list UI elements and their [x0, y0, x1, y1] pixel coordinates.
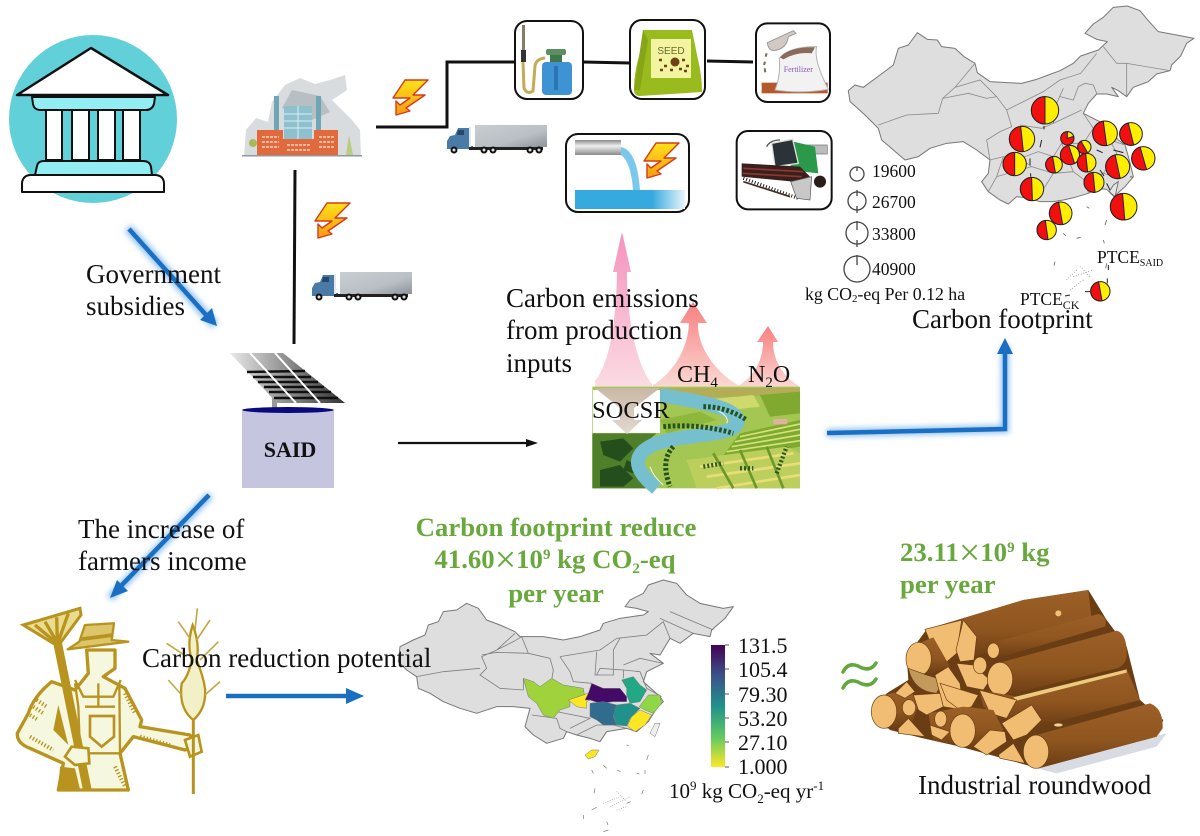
- pie charts PTCE by province: [1003, 97, 1155, 303]
- national outline: [398, 580, 733, 743]
- text: carbon footprint reduce heading: kg CO: [550, 544, 632, 574]
- text: carbon emissions from production inputs: from production: [506, 315, 683, 345]
- arrow: farmer to reduction map: [226, 688, 364, 704]
- Taiwan and South China Sea islands: [1054, 177, 1133, 290]
- illustration: farmer with rake and wheat: [17, 608, 220, 794]
- text: SOCSR: SOCSR: [592, 397, 670, 424]
- text: increase of farmers income: The increase of: [78, 514, 244, 544]
- legend: pie size: -eq Per 0.12 ha: [857, 284, 965, 304]
- text: industrial roundwood: Industrial roundwood: [918, 770, 1152, 800]
- legend: colour bar: 1.000: [738, 754, 788, 779]
- legend: colour bar: 10: [669, 779, 690, 803]
- legend: pie size: 2: [852, 293, 857, 305]
- text: increase of farmers income: farmers income: [78, 546, 247, 576]
- arrow: SAID to farmland: [398, 439, 538, 447]
- map: carbon footprint China: [848, 6, 1194, 303]
- text: N2O: N: [748, 362, 765, 388]
- text: 23.11 x 10^9 kg per year: per year: [900, 569, 996, 599]
- legend: pie size: [805, 161, 965, 305]
- text: carbon footprint reduce heading: Carbon footprint reduce: [416, 512, 697, 542]
- text: 23.11 x 10^9 kg per year: 23.11: [900, 532, 1050, 574]
- legend: colour bar: -1: [813, 778, 824, 793]
- text: carbon footprint reduce heading: ×: [495, 539, 516, 581]
- text: carbon footprint: Carbon footprint: [912, 304, 1093, 334]
- legend: colour bar: -eq yr: [764, 779, 813, 803]
- legend: pie size: 33800: [872, 224, 916, 244]
- text: 23.11 x 10^9 kg per year: kg: [1015, 537, 1050, 567]
- legend: colour bar: 2: [757, 791, 764, 806]
- legend: colour bar: 79.30: [738, 682, 788, 707]
- icon: SAID solar irrigation device: SAID: [264, 437, 316, 462]
- icon: lightning 1: [393, 80, 428, 115]
- legend: pie size: 40900: [872, 259, 916, 279]
- icon: government bank: [9, 35, 177, 203]
- illustration: industrial roundwood logs: [871, 590, 1167, 773]
- legend: colour bar: 27.10: [738, 730, 788, 755]
- text: CH4: 4: [710, 375, 718, 391]
- text: CH4: CH: [677, 362, 710, 388]
- icon: fertilizer: Fertilizer: [784, 65, 813, 74]
- icon: seed bag: SEED: [657, 46, 685, 57]
- legend: colour bar: kg CO: [696, 779, 757, 803]
- icon: truck 1: [447, 125, 547, 154]
- label: PTCE SAID: SAID: [1140, 258, 1163, 269]
- text: carbon emissions from production inputs: inputs: [506, 348, 572, 378]
- text: 23.11 x 10^9 kg per year: ×: [959, 532, 980, 574]
- arrow: CH4 emission: [653, 302, 738, 390]
- text: carbon footprint reduce heading: 41.60: [434, 539, 676, 581]
- icon: sprayer: [515, 21, 583, 99]
- arrow: SAID to farmer: [110, 495, 210, 598]
- province colours: [523, 677, 662, 832]
- icon: truck 2: [312, 272, 412, 300]
- legend: colour bar: 9: [690, 778, 696, 793]
- legend: colour bar: 105.4: [738, 657, 788, 682]
- text: carbon footprint reduce heading: 2: [632, 561, 640, 577]
- arrow: government to SAID: [128, 228, 217, 326]
- map: carbon reduction potential: [398, 580, 733, 832]
- text: carbon footprint reduce heading: 9: [543, 547, 550, 563]
- connector: seed to fertilizer: [707, 61, 753, 62]
- text: carbon footprint reduce heading: per year: [508, 578, 604, 608]
- arrow: N2O emission: [738, 326, 799, 390]
- icon: fertilizer: [756, 23, 830, 102]
- legend: colour bar: 131.5: [738, 633, 788, 658]
- icon: SAID solar irrigation device: [230, 353, 345, 488]
- text: N2O: 2: [765, 375, 773, 391]
- connector: factory to inputs: [376, 62, 515, 127]
- icon: harvester: [737, 131, 832, 209]
- illustration: river farmland: [592, 387, 800, 488]
- label: PTCE SAID: PTCE: [1097, 247, 1140, 267]
- text: 23.11 x 10^9 kg per year: 9: [1007, 540, 1015, 556]
- text: N2O: O: [773, 362, 790, 388]
- connector: factory to SAID: [294, 170, 295, 344]
- icon: irrigation water: [566, 134, 689, 212]
- text: government subsidies: subsidies: [86, 291, 185, 321]
- text: government subsidies: Government: [86, 259, 221, 289]
- legend: pie size: 26700: [872, 192, 916, 212]
- text: carbon emissions from production inputs: Carbon emissions: [506, 283, 699, 313]
- legend: colour bar: 53.20: [738, 706, 788, 731]
- icon: approximately equal sign: [843, 663, 876, 688]
- label: PTCE CK: PTCE: [1020, 289, 1063, 309]
- legend: pie size: kg CO: [805, 284, 852, 304]
- text: 23.11 x 10^9 kg per year: 10: [980, 537, 1007, 567]
- icon: seed bag: [630, 20, 705, 99]
- label: PTCE CK: CK: [1063, 298, 1080, 312]
- legend: pie size: 19600: [872, 161, 916, 181]
- icon: lightning 2: [315, 203, 350, 238]
- connector: sprayer to seed: [583, 62, 630, 63]
- panel: SOCSR white box with down arrow: [593, 388, 660, 434]
- arrow: input emissions (pink): [595, 232, 652, 390]
- icon: factory: [242, 75, 362, 156]
- arrow: farmland to carbon footprint: [827, 338, 1013, 433]
- text: carbon footprint reduce heading: 10: [516, 544, 543, 574]
- legend: colour bar: [669, 633, 824, 806]
- text: carbon reduction potential: Carbon reduction potential: [142, 643, 431, 673]
- national outline: [848, 6, 1194, 204]
- text: carbon footprint reduce heading: -eq: [640, 544, 676, 574]
